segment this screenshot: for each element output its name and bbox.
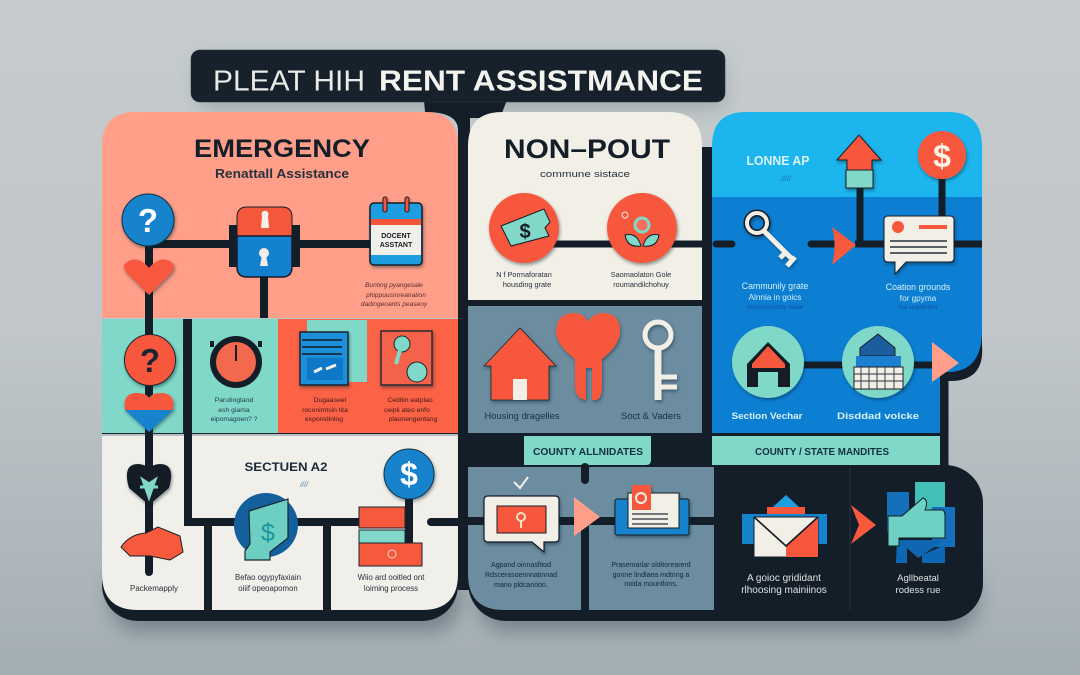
text: voucher caption (235, 573, 301, 593)
icon: calendar (370, 197, 422, 265)
text: wrench caption: plaonengentang (389, 416, 438, 423)
subheading: community: commune sistace (540, 169, 630, 179)
text: key caption: Alnnia in goics (749, 293, 801, 302)
text: calendar caption: Bunting pyangesale (365, 282, 423, 289)
text: message caption: Rdscerasoennnatinnad (485, 572, 557, 579)
panel: process row (468, 467, 955, 610)
tab: county allnidates (524, 436, 651, 465)
text: wrench caption (384, 397, 438, 423)
text: plant caption: roumandilchohuy (613, 280, 669, 289)
icon: question circle blue: ? (138, 202, 158, 239)
icon: handshake (121, 527, 183, 560)
text: plant caption: Saomaolaton Gole (611, 270, 671, 279)
text: cash caption (496, 270, 552, 289)
text: drawer caption (358, 573, 425, 593)
icon: coral chevron (851, 505, 876, 544)
decorative caption mark: //// (299, 482, 309, 489)
text: cash caption: housding grate (503, 280, 551, 289)
icon: dollar circle coral: $ (933, 138, 951, 174)
text: envelope caption: rlhoosing mainiinos (741, 585, 827, 596)
icon: split heart (124, 393, 174, 432)
text: key caption: Cammunily grate (742, 281, 808, 291)
icon: question circle blue (122, 194, 174, 246)
text: plant caption (611, 270, 671, 289)
text: stopwatch caption (211, 397, 258, 423)
heading: EMERGENCY: EMERGENCY (194, 135, 370, 163)
text: voucher caption: Befao ogypyfaxiain (235, 573, 301, 582)
icon: house with teal base (837, 135, 881, 188)
text: document caption: roconimtsin tita (302, 407, 348, 414)
icon: heart key (556, 313, 620, 400)
text: cash caption: N f Pormaforatan (496, 270, 552, 279)
text: drawer caption: Wiio ard ooitled ont (358, 573, 425, 582)
icon: money voucher (234, 493, 298, 560)
text: message caption: Coation grounds (886, 282, 951, 292)
text: handshake caption: Packemapply (130, 584, 178, 593)
icon: lock (229, 207, 300, 277)
icon: message with pin (484, 496, 559, 552)
heading: section: SECTUEN A2 (244, 460, 328, 474)
text: stopwatch caption: eipomagoen? ? (211, 416, 258, 423)
text: calendar caption (361, 282, 428, 308)
icon: message card (884, 216, 954, 274)
text: document caption: exponidinlog (305, 416, 343, 423)
icon: key (645, 322, 677, 400)
text: voucher caption: oiiif opeoapomon (238, 584, 298, 593)
text: folder caption: Prasemarlar olditorearerd (611, 562, 691, 569)
text: key caption: closunmodby nade (746, 304, 804, 311)
icon: document (300, 332, 348, 385)
text: calendar caption: dadingeoants peaseoy (361, 301, 428, 308)
text: stopwatch caption: esh giama (218, 407, 250, 414)
connector line (550, 240, 732, 248)
connector lines: local aid (716, 175, 982, 365)
icon: cash circle (489, 193, 559, 263)
panel: emergency rental assistance (102, 112, 458, 610)
icon: envelope (742, 495, 827, 557)
icon: stopwatch (210, 336, 262, 388)
icon: plant circle (607, 193, 677, 263)
text: key caption (742, 281, 808, 311)
text: message caption: for gpyma (900, 294, 937, 303)
decorative caption mark: ///// (780, 176, 792, 183)
text: message caption: ma seyplisidor (898, 304, 938, 311)
text: message caption (485, 562, 557, 589)
text: message caption: mano pldcanoon. (494, 582, 548, 589)
text: document caption: Dugaaseet (314, 397, 347, 404)
icon: dark heart (127, 464, 171, 505)
text: hand caption (896, 573, 940, 596)
icon: arrow (832, 227, 856, 265)
text: section voucher: Section Vechar (732, 411, 803, 421)
text: message caption: Agpand oinnasfitod (491, 562, 551, 569)
title banner (191, 50, 725, 102)
text: document caption (302, 397, 348, 423)
title banner: RENT ASSISTMANCE (379, 66, 703, 98)
icon: document folder (615, 485, 689, 535)
text: folder caption (611, 562, 691, 588)
connector lines: emergency (149, 240, 458, 610)
icon: salmon arrow (932, 342, 959, 382)
icon: drawer stack (359, 507, 422, 566)
icon: cash circle: $ (519, 221, 531, 243)
icon: money voucher: $ (261, 519, 275, 547)
tab: county state mandates (712, 436, 940, 465)
subheading: rental assistance: Renattall Assistance (215, 167, 349, 181)
icon: house (484, 328, 556, 400)
panel: non-profit (468, 112, 732, 433)
text: envelope caption: A goioc grididant (747, 573, 821, 584)
text: hand caption: rodess rue (896, 585, 940, 596)
icon: dollar circle blue: $ (400, 456, 418, 492)
icon: teal calendar circle (842, 326, 914, 398)
text: envelope caption (741, 573, 827, 596)
text: message caption (886, 282, 951, 311)
text: house caption: Housing dragelles (484, 411, 560, 421)
connector lines: process (468, 467, 855, 610)
heading: lonne ap: LONNE AP (746, 153, 810, 168)
icon: calendar: ASSTANT (380, 242, 413, 249)
text: wrench caption: Ceditin eatplao (387, 397, 433, 404)
panel: local aid (712, 112, 982, 433)
text: folder caption: noida mountlons. (624, 581, 678, 588)
title banner: PLEAT HIH (213, 66, 365, 98)
icon: question circle coral: ? (140, 342, 160, 379)
dark backing frame (102, 100, 983, 621)
text: drawer caption: loiming process (364, 584, 418, 593)
text: calendar caption: phippuusmreanation (365, 292, 426, 299)
text: wrench caption: ceipli ateo enfo (384, 407, 430, 414)
text: stopwatch caption: Parutingtand (215, 397, 253, 404)
text: folder caption: gonne lindlaea mdtnng a (613, 572, 689, 579)
icon: heart coral (124, 260, 174, 295)
icon: salmon arrow (574, 497, 600, 536)
icon: dollar circle coral (918, 131, 966, 179)
panel shadows (110, 60, 978, 632)
icon: check mark (514, 477, 528, 488)
text: key caption: Soct & Vaders (621, 411, 682, 421)
heading: NON-POUT: NON–POUT (504, 134, 671, 164)
tab: county allnidates: COUNTY ALLNIDATES (533, 447, 643, 458)
text: hand caption: Agllbeatal (897, 573, 939, 584)
icon: calendar: DOCENT (381, 233, 411, 240)
icon: dollar circle blue (384, 449, 434, 499)
text: dedicated vouchers: Disddad volcke (837, 411, 919, 421)
icon: long key (747, 213, 795, 266)
tab: county state mandates: COUNTY / STATE MANDITES (755, 447, 889, 458)
icon: teal house circle (732, 326, 804, 398)
icon: wrench tile (381, 331, 432, 385)
icon: hand (887, 482, 955, 563)
icon: question circle coral (124, 334, 176, 386)
